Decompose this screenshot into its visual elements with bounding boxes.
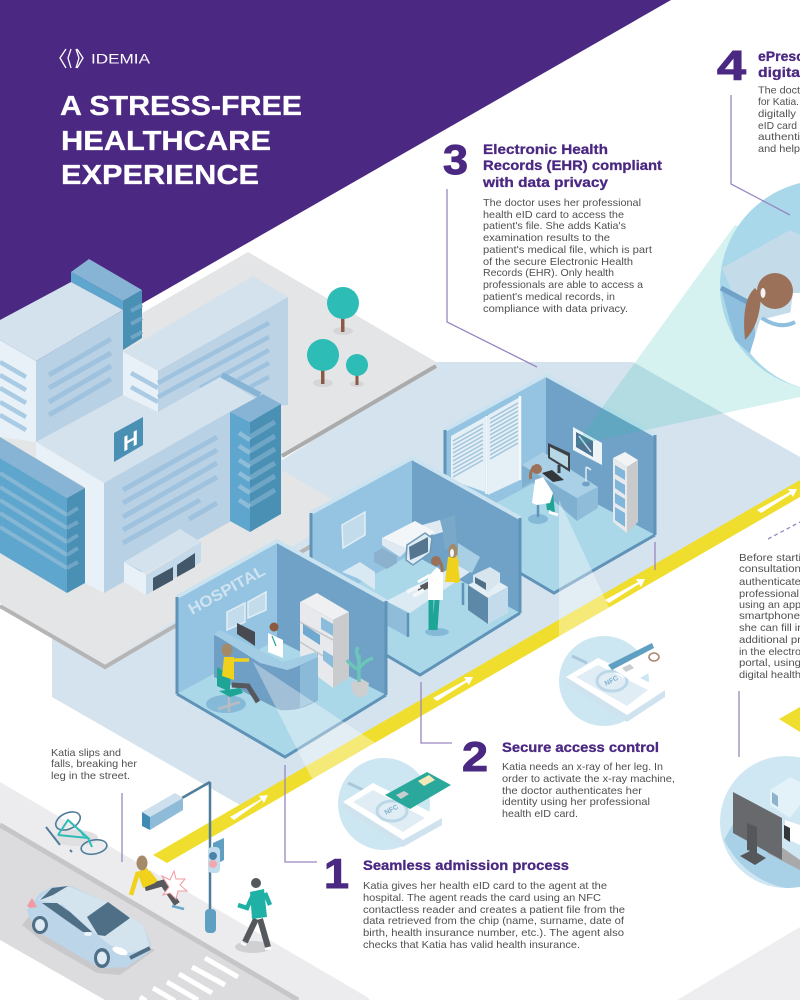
doctor standing [418, 556, 449, 636]
trees [307, 287, 368, 387]
room: x-ray [311, 458, 520, 675]
roof box [71, 259, 142, 350]
step 5 text: teleconsultation: professional [739, 588, 799, 600]
desk [522, 452, 598, 521]
back wing [123, 276, 288, 412]
step 4: ePrescription: 4 [717, 42, 747, 89]
entrance [124, 529, 201, 595]
patient [407, 544, 460, 596]
beam: office to doctor close-up [575, 225, 800, 445]
wall sign: HOSPITAL: HOSPITAL [186, 562, 268, 618]
title: HEALTHCARE [61, 125, 271, 156]
step 4: ePrescription: The doct [758, 84, 800, 96]
step 2: secure access: 2 [462, 733, 488, 780]
step 4: ePrescription: eID card [758, 120, 797, 132]
step 3: EHR: professionals are able to access a [483, 279, 643, 291]
monitor [237, 623, 255, 646]
step 5 text: teleconsultation: digital health [739, 669, 800, 681]
beam: reception to card [253, 662, 412, 830]
step 3: EHR: patient's file. She adds Katia's [483, 220, 626, 232]
step 1: seamless admission: checks that Katia has valid health insurance. [363, 939, 580, 951]
step 5 text: teleconsultation: in the electro [739, 646, 800, 658]
step 2: secure access: order to activate the x-ray machine, [502, 773, 675, 785]
step 5 text: teleconsultation: Before starti [739, 552, 800, 564]
examination bed [386, 543, 480, 637]
doctor at desk [528, 464, 558, 524]
step 3: EHR: of the secure Electronic Health [483, 256, 633, 268]
yellow marker [779, 707, 800, 732]
street sign and pole [142, 782, 224, 933]
step 5 text: teleconsultation [739, 552, 800, 681]
plant [347, 647, 373, 698]
step 3: EHR: Records (EHR) compliant [483, 157, 662, 173]
light blue ground slab [52, 362, 800, 805]
left blue wing [0, 437, 85, 593]
step 1: seamless admission: birth, health insurance number, etc.). The agent also [363, 927, 624, 939]
step 1: seamless admission: 1 [324, 850, 349, 897]
step 3: EHR: Electronic Health [483, 141, 608, 157]
step 5 text: teleconsultation: portal, using [739, 657, 800, 669]
close-up: admission card reader: NFC [384, 804, 400, 817]
step 5 text: teleconsultation: smartphone [739, 610, 800, 622]
text: Katia slips [51, 747, 138, 782]
step 2: secure access: Katia needs an x-ray of her leg. In [502, 761, 663, 773]
icon: H sign: H [123, 425, 138, 457]
step 2: secure access [462, 733, 675, 820]
step 1: seamless admission: hospital. The agent reads the card using an NFC [363, 892, 601, 904]
step 1: seamless admission: data retrieved from the chip (name, surname, date of [363, 915, 624, 927]
step 4: ePrescription: authenti [758, 131, 800, 143]
crosswalk [140, 958, 238, 1000]
street road [0, 823, 300, 1000]
step 2: secure access: identity using her professional [502, 796, 650, 808]
title: EXPERIENCE [61, 159, 259, 190]
Katia fallen [131, 856, 187, 909]
text: Katia slips: leg in the street. [51, 770, 130, 782]
step 4: ePrescription: digitally [758, 108, 797, 120]
step 2: secure access: the doctor authenticates her [502, 785, 643, 797]
step 3: EHR: The doctor uses her professional [483, 197, 641, 209]
x-ray machine [342, 515, 457, 590]
step 5 text: teleconsultation: additional pr [739, 634, 800, 646]
poster [573, 427, 602, 465]
pedestrian [235, 878, 271, 953]
step 4: ePrescription: digita [758, 64, 800, 80]
traffic light [208, 838, 224, 873]
lamp [586, 467, 591, 484]
step 3: EHR: examination results to the [483, 232, 610, 244]
step 3: EHR: patient's medical records, in [483, 291, 615, 303]
close-up: doctor [720, 180, 800, 390]
main block [36, 375, 263, 593]
car [22, 886, 155, 975]
professional eID card [608, 643, 675, 682]
purple header background [0, 0, 671, 385]
step 2: secure access: health eID card. [502, 808, 578, 820]
corner pavement [677, 927, 800, 1000]
step 1: seamless admission: Katia gives her health eID card to the agent at the [363, 880, 607, 892]
window blinds [451, 396, 520, 495]
health eID card [385, 772, 451, 809]
title: A STRESS-FREE [60, 90, 302, 121]
room: reception [177, 541, 386, 757]
text: Katia slips: falls, breaking her [51, 758, 138, 770]
cabinet [468, 567, 508, 624]
step 3: EHR: patient's medical file, which is part [483, 244, 652, 256]
logo: IDEMIA: IDEMIA [91, 50, 151, 66]
text: Katia slips: Katia slips and [51, 747, 121, 759]
monitor [542, 443, 570, 482]
bookcase [613, 452, 638, 533]
wall frames [227, 592, 266, 630]
hospital grounds [0, 252, 436, 667]
step 4: ePrescription: for Katia. [758, 96, 799, 108]
tall block [0, 282, 123, 442]
title [60, 90, 302, 190]
step 3: EHR: compliance with data privacy. [483, 303, 628, 315]
close-up: smartphone authentication [720, 756, 800, 888]
connector lines [122, 95, 800, 862]
street pavement [0, 782, 370, 1000]
step 5 text: teleconsultation: authenticate [739, 576, 800, 588]
logo: IDEMIA [60, 49, 151, 68]
step 5 text: teleconsultation: she can fill ir [739, 622, 800, 634]
icon: impact star [162, 871, 187, 899]
step 1: seamless admission: Seamless admission process [363, 857, 569, 873]
monitor [733, 792, 782, 865]
shelf [300, 593, 349, 688]
Katia at reception [206, 644, 258, 713]
wall frame [342, 512, 365, 548]
step 3: EHR [443, 136, 662, 315]
step 2: secure access: Secure access control [502, 739, 659, 755]
hospital building [0, 259, 288, 595]
step 4: ePrescription: and help [758, 143, 800, 155]
room: doctor's office [445, 375, 655, 593]
step 3: EHR: 3 [443, 136, 468, 183]
close-up: access card reader: NFC [604, 675, 620, 688]
close-up: access card reader [559, 636, 675, 726]
beam: x-ray to card [559, 500, 650, 695]
step 3: EHR: with data privacy [482, 174, 608, 190]
bicycle [46, 808, 108, 856]
step 3: EHR: health eID card to access the [483, 209, 624, 221]
step 5 text: teleconsultation: using an app [739, 599, 800, 611]
right tower [230, 394, 281, 532]
icon: H sign [114, 417, 143, 462]
step 5 text: teleconsultation: consultation [739, 563, 800, 575]
step 1: seamless admission [324, 850, 625, 951]
receptionist [268, 622, 283, 658]
step 4: ePrescription [717, 42, 800, 155]
close-up: admission card reader [338, 758, 451, 850]
step 3: EHR: Records (EHR). Only health [483, 267, 614, 279]
yellow path [153, 480, 800, 863]
reception counter [214, 630, 318, 710]
step 1: seamless admission: contactless reader and creates a patient file from the [363, 904, 625, 916]
